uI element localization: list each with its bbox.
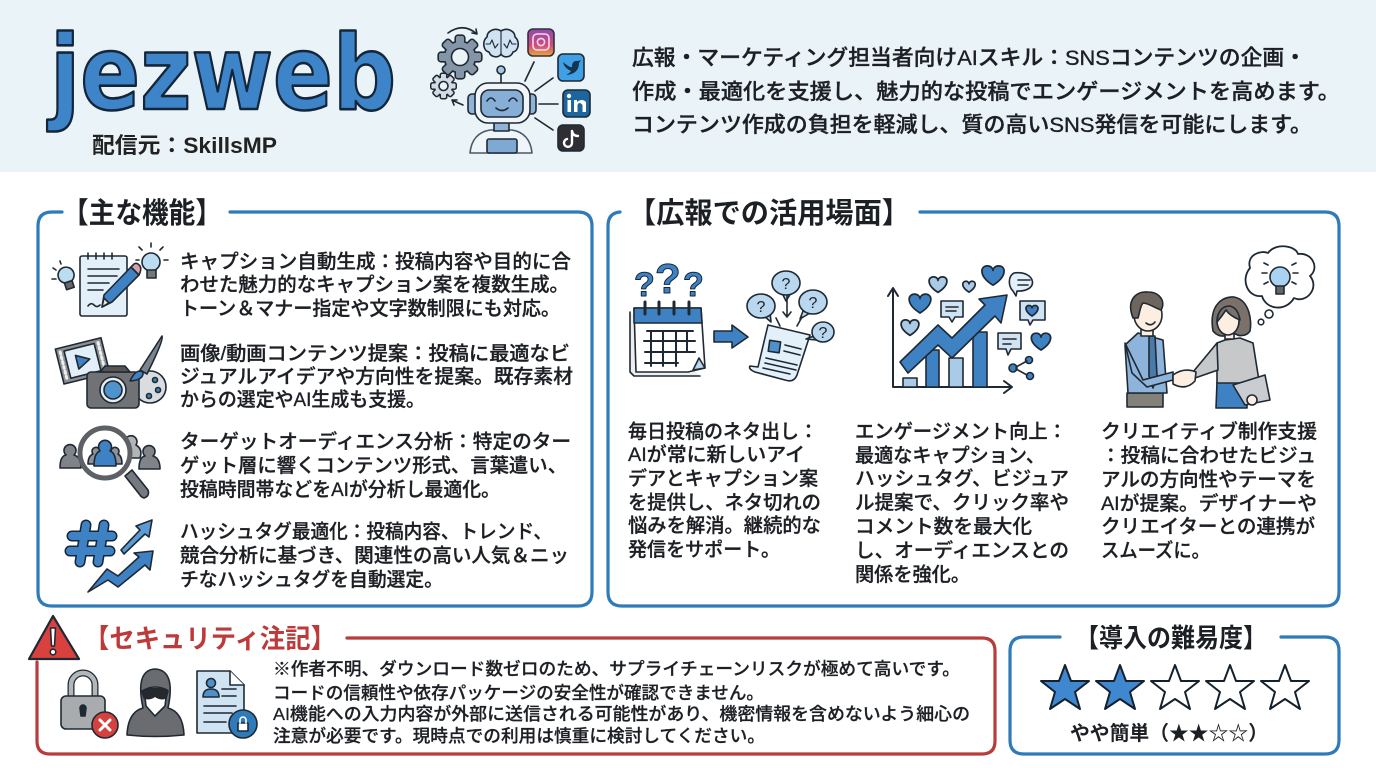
panel: PR use cases xyxy=(608,197,1339,606)
feature text: hashtag optimisation: 競合分析に基づき、関連性の高い人気＆ニッ xyxy=(180,545,569,567)
security note text: AI機能への入力内容が外部に送信される可能性があり、機密情報を含めないよう細心の xyxy=(273,704,970,724)
feature text: content proposals: 画像/動画コンテンツ提案：投稿に最適なビ xyxy=(180,343,570,365)
intro text: 広報・マーケティング担当者向けAIスキル：SNSコンテンツの企画・ xyxy=(632,46,1306,70)
feature text: content proposals: からの選定やAI生成も支援。 xyxy=(180,389,425,411)
feature text: hashtag optimisation: ハッシュタグ最適化：投稿内容、トレンド、 xyxy=(180,521,552,543)
use case text: engagement: 関係を強化。 xyxy=(855,564,970,586)
feature text: audience analysis: 投稿時間帯などをAIが分析し最適化。 xyxy=(180,479,500,501)
use case text: engagement xyxy=(855,421,1069,586)
icon: warning triangle xyxy=(29,616,79,659)
icon: robot with social media xyxy=(432,28,590,153)
heading: PR use cases: 【広報での活用場面】 xyxy=(628,197,910,230)
panel: main features xyxy=(38,197,592,606)
feature text: content proposals: ジュアルアイデアや方向性を提案。既存素材 xyxy=(180,365,573,388)
icon: calendar to article: ? xyxy=(808,295,818,312)
icon: calendar to article xyxy=(630,255,834,381)
icon: locked document xyxy=(197,671,257,738)
use case text: creative support: クリエイターとの連携が xyxy=(1101,516,1315,538)
use case text: daily posts: を提供し、ネタ切れの xyxy=(628,492,821,514)
use case text: daily posts: 毎日投稿のネタ出し： xyxy=(628,421,818,443)
use case text: engagement: ル提案で、クリック率や xyxy=(855,492,1069,514)
icon: calendar to article: ? xyxy=(683,266,704,304)
use case text: daily posts: デアとキャプション案 xyxy=(628,467,818,490)
header band xyxy=(0,0,1376,172)
heading: adoption difficulty: 【導入の難易度】 xyxy=(1075,623,1267,653)
icon: calendar to article: ? xyxy=(756,299,766,316)
use case text: engagement: ハッシュタグ、ビジュア xyxy=(855,468,1069,490)
icon: calendar to article: ? xyxy=(782,276,790,293)
use case text: engagement: エンゲージメント向上： xyxy=(855,421,1067,443)
feature text: caption generation: わせた魅力的なキャプション案を複数生成。 xyxy=(180,274,569,296)
icon: notepad and pencil xyxy=(52,243,168,316)
feature text: caption generation: トーン＆マナー指定や文字数制限にも対応。 xyxy=(180,298,560,320)
feature text: caption generation xyxy=(180,251,571,320)
panel: security note xyxy=(29,616,995,754)
feature text: hashtag optimisation: チなハッシュタグを自動選定。 xyxy=(180,569,443,591)
difficulty label: やや簡単（★★☆☆） xyxy=(1070,722,1268,745)
feature text: audience analysis: ターゲットオーディエンス分析：特定のター xyxy=(180,430,571,453)
icon: broken lock xyxy=(61,673,118,738)
chart: engagement growth xyxy=(888,266,1051,393)
panel: adoption difficulty xyxy=(1010,623,1339,754)
security note text: ※作者不明、ダウンロード数ゼロのため、サプライチェーンリスクが極めて高いです。 xyxy=(273,659,960,679)
use case text: engagement: し、オーディエンスとの xyxy=(855,539,1069,562)
intro text xyxy=(632,46,1340,137)
logo wordmark: jezweb xyxy=(47,14,396,134)
intro text: コンテンツ作成の負担を軽減し、質の高いSNS発信を可能にします。 xyxy=(632,113,1312,137)
source line: 配信元：SkillsMP xyxy=(92,133,277,158)
use case text: daily posts: 発信をサポート。 xyxy=(628,539,780,561)
heading: security note: 【セキュリティ注記】 xyxy=(84,624,336,654)
icon: calendar to article: ? xyxy=(818,325,828,342)
use case text: creative support xyxy=(1101,420,1317,562)
use case text: daily posts: AIが常に新しいアイ xyxy=(628,444,805,466)
security note text: 注意が必要です。現時点での利用は慎重に検討してください。 xyxy=(273,726,765,746)
feature text: caption generation: キャプション自動生成：投稿内容や目的に合 xyxy=(180,251,571,273)
icon: calendar to article: ? xyxy=(634,266,655,304)
use case text: creative support: スムーズに。 xyxy=(1101,539,1210,562)
icon: calendar to article: ? xyxy=(655,255,681,302)
star rating: two of five xyxy=(1041,665,1309,709)
use case text: engagement: コメント数を最大化 xyxy=(855,516,1032,538)
use case text: creative support: アルの方向性やテーマを xyxy=(1101,469,1316,491)
security note text xyxy=(273,659,970,746)
feature text: hashtag optimisation xyxy=(180,521,569,591)
use case text: daily posts xyxy=(628,421,821,561)
intro text: 作成・最適化を支援し、魅力的な投稿でエンゲージメントを高めます。 xyxy=(632,80,1340,104)
security note text: コードの信頼性や依存パッケージの安全性が確認できません。 xyxy=(273,683,764,703)
icon: hooded hacker xyxy=(127,669,184,736)
use case text: daily posts: 悩みを解消。継続的な xyxy=(628,515,821,537)
feature text: content proposals xyxy=(180,343,573,411)
feature text: audience analysis: ゲット層に響くコンテンツ形式、言葉遣い、 xyxy=(180,455,567,477)
icon: film, camera and palette xyxy=(55,336,166,408)
icon: hashtag with arrows xyxy=(70,520,153,592)
use case text: engagement: 最適なキャプション、 xyxy=(855,445,1045,467)
use case text: creative support: AIが提案。デザイナーや xyxy=(1101,492,1317,515)
use case text: creative support: ：投稿に合わせたビジュ xyxy=(1101,445,1316,467)
feature text: audience analysis xyxy=(180,430,571,501)
icon: handshake and idea xyxy=(1125,246,1314,408)
heading: main features: 【主な機能】 xyxy=(62,197,222,230)
use case text: creative support: クリエイティブ制作支援 xyxy=(1101,420,1317,443)
icon: audience magnifier xyxy=(60,428,160,498)
